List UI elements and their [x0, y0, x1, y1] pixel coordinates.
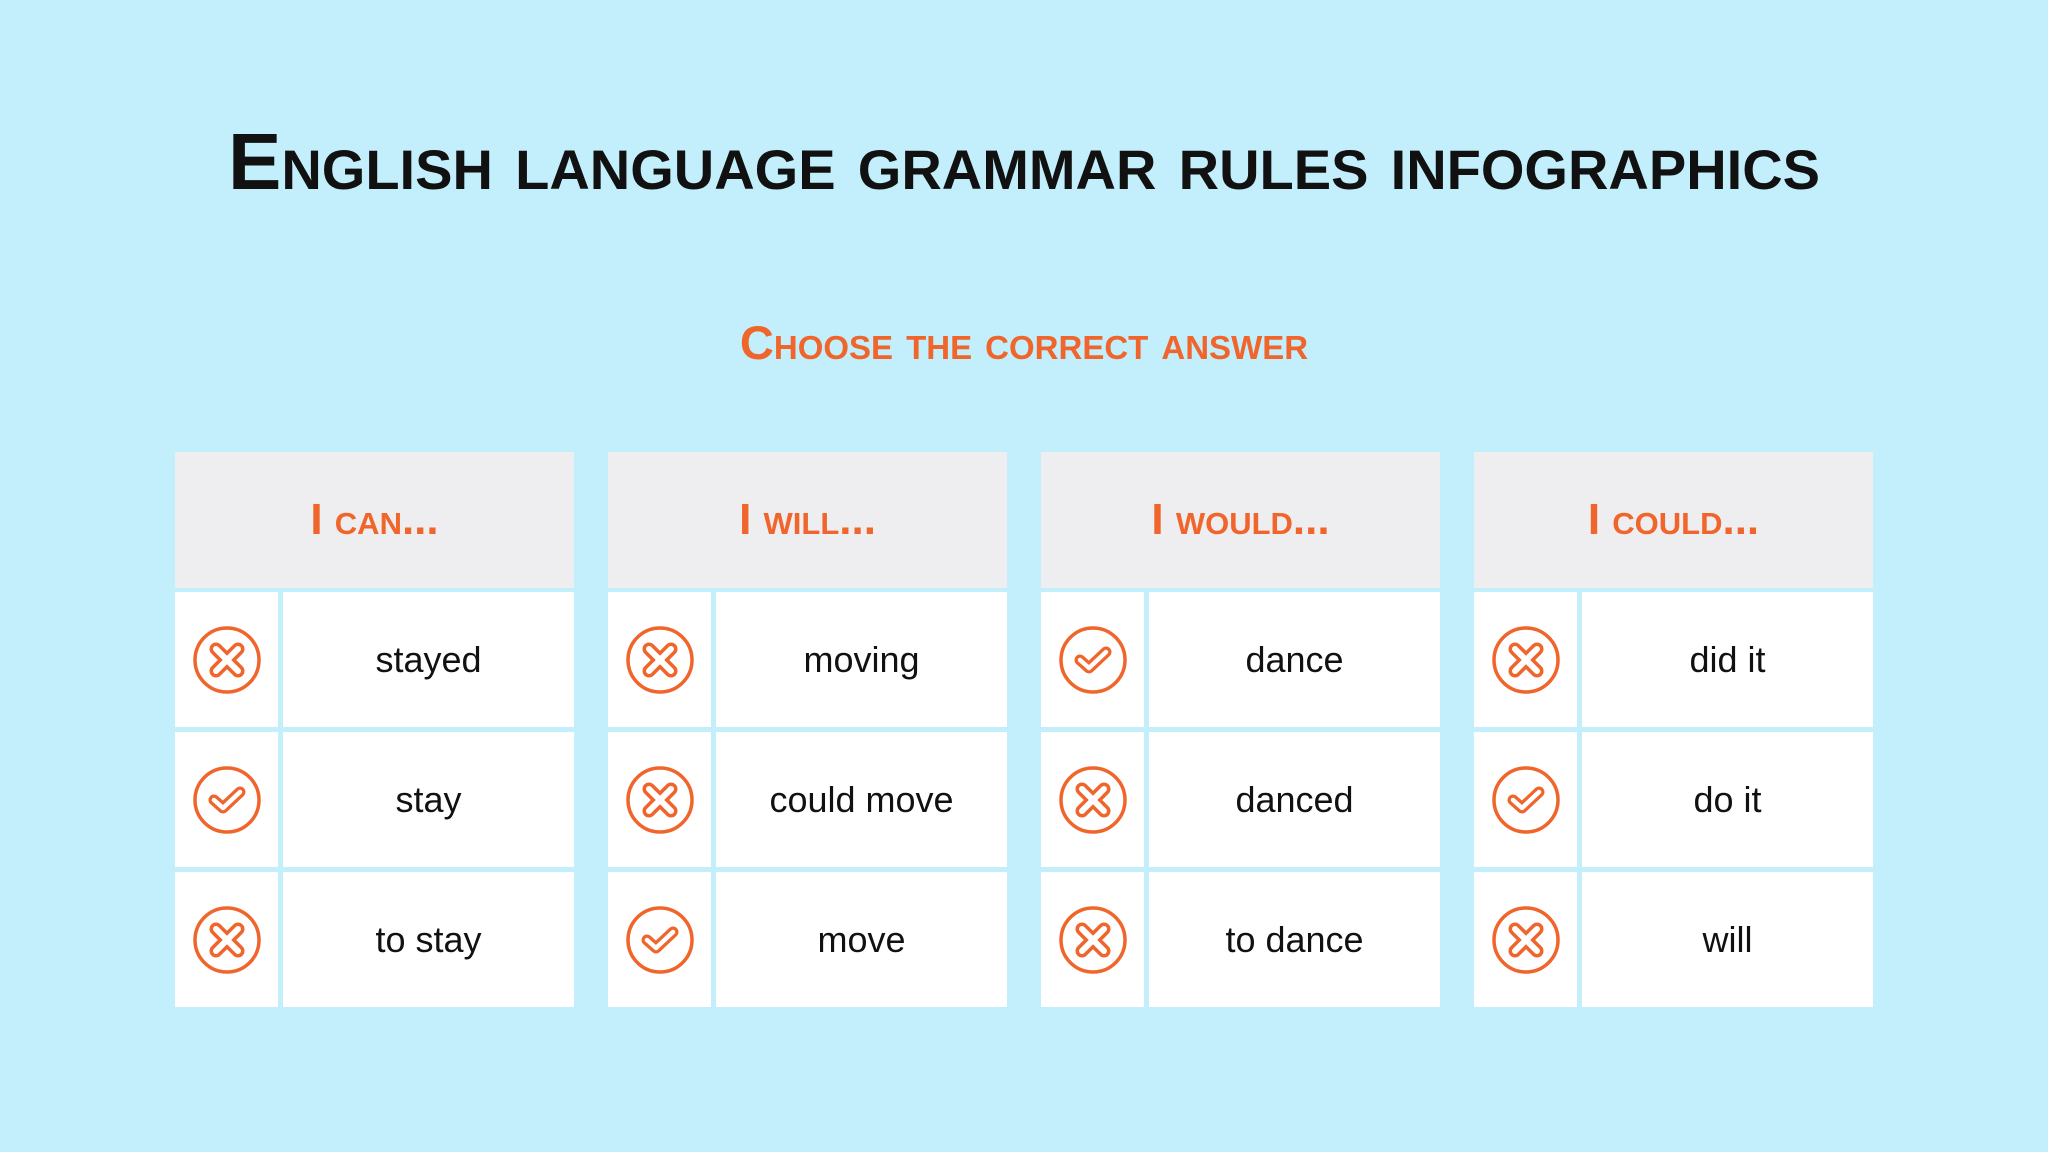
option: [1582, 592, 1873, 727]
icon: wrong: [1474, 872, 1577, 1007]
icon: correct: [1474, 732, 1577, 867]
title: English language grammar rules infographics: [228, 117, 1820, 206]
header: [1041, 452, 1440, 588]
option: [1149, 872, 1440, 1007]
option: danced: [1235, 778, 1354, 820]
option: move: [817, 918, 906, 960]
option: [1149, 732, 1440, 867]
option: [716, 732, 1007, 867]
icon: correct: [608, 872, 711, 1007]
option: could move: [769, 778, 954, 820]
header: I will...: [739, 495, 876, 544]
header: [175, 452, 574, 588]
icon: wrong: [1041, 732, 1144, 867]
option: will: [1702, 918, 1752, 960]
option: do it: [1693, 778, 1762, 820]
header: I would...: [1151, 495, 1330, 544]
option: [1149, 592, 1440, 727]
option: [283, 732, 574, 867]
option: [716, 592, 1007, 727]
option: [1582, 872, 1873, 1007]
panel: I could: [1474, 452, 1873, 1007]
header: [608, 452, 1007, 588]
option: stayed: [375, 638, 482, 680]
option: to stay: [375, 918, 482, 960]
header: I could...: [1588, 495, 1759, 544]
option: moving: [803, 638, 920, 680]
option: [283, 872, 574, 1007]
option: [283, 592, 574, 727]
icon: wrong: [175, 872, 278, 1007]
header: I can...: [310, 495, 439, 544]
icon: wrong: [1041, 872, 1144, 1007]
subtitle: Choose the correct answer: [740, 316, 1308, 369]
icon: wrong: [1474, 592, 1577, 727]
option: to dance: [1225, 918, 1364, 960]
panel: I can: [175, 452, 574, 1007]
icon: wrong: [175, 592, 278, 727]
option: [1582, 732, 1873, 867]
icon: wrong: [608, 732, 711, 867]
icon: wrong: [608, 592, 711, 727]
option: did it: [1689, 638, 1766, 680]
icon: correct: [175, 732, 278, 867]
option: dance: [1245, 638, 1344, 680]
panel: I will: [608, 452, 1007, 1007]
option: stay: [395, 778, 462, 820]
panel: I would: [1041, 452, 1440, 1007]
header: [1474, 452, 1873, 588]
option: [716, 872, 1007, 1007]
icon: correct: [1041, 592, 1144, 727]
